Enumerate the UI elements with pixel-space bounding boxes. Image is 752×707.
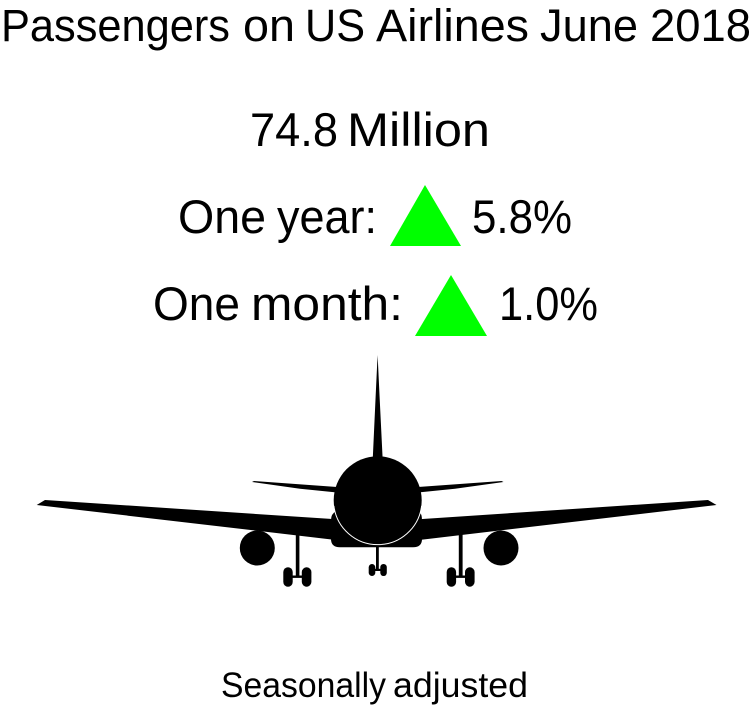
- label: one month: One: [153, 277, 240, 330]
- fuselage circle: [334, 456, 422, 544]
- icon: green up triangle, one year: [390, 185, 461, 246]
- fuselage highlight arc: [334, 506, 422, 545]
- left main landing gear: [283, 532, 311, 587]
- right main landing gear: [447, 532, 475, 587]
- tailplanes: [252, 481, 337, 492]
- lower fuselage fairing: [331, 511, 422, 547]
- headline figure: [250, 103, 490, 156]
- one year change: [178, 185, 572, 246]
- value: one month: 1.0%: [499, 277, 598, 330]
- headline figure: 74.8: [250, 103, 338, 156]
- label: one year: [178, 190, 377, 243]
- title: on: [243, 0, 295, 51]
- title: [1, 0, 751, 51]
- footnote: Seasonally: [221, 666, 386, 705]
- footnote: adjusted: [393, 666, 528, 705]
- title: Passengers: [1, 0, 230, 51]
- icon: green up triangle, one month: [415, 275, 487, 336]
- tail fin: [373, 355, 383, 460]
- headline figure: Million: [347, 103, 490, 156]
- icon: airplane front view: [37, 355, 716, 587]
- label: one month: month:: [251, 277, 403, 330]
- value: one year: 5.8%: [472, 190, 572, 243]
- title: 2018: [650, 0, 751, 51]
- label: one year: One: [178, 190, 266, 243]
- engines: [240, 530, 275, 566]
- footnote: [221, 666, 528, 705]
- label: one month: [153, 277, 403, 330]
- label: one year: year:: [277, 190, 377, 243]
- one month change: [153, 275, 598, 336]
- nose landing gear: [369, 546, 387, 576]
- title: Airlines: [376, 0, 529, 51]
- title: June: [540, 0, 638, 51]
- wings: [37, 500, 340, 540]
- title: US: [305, 0, 365, 51]
